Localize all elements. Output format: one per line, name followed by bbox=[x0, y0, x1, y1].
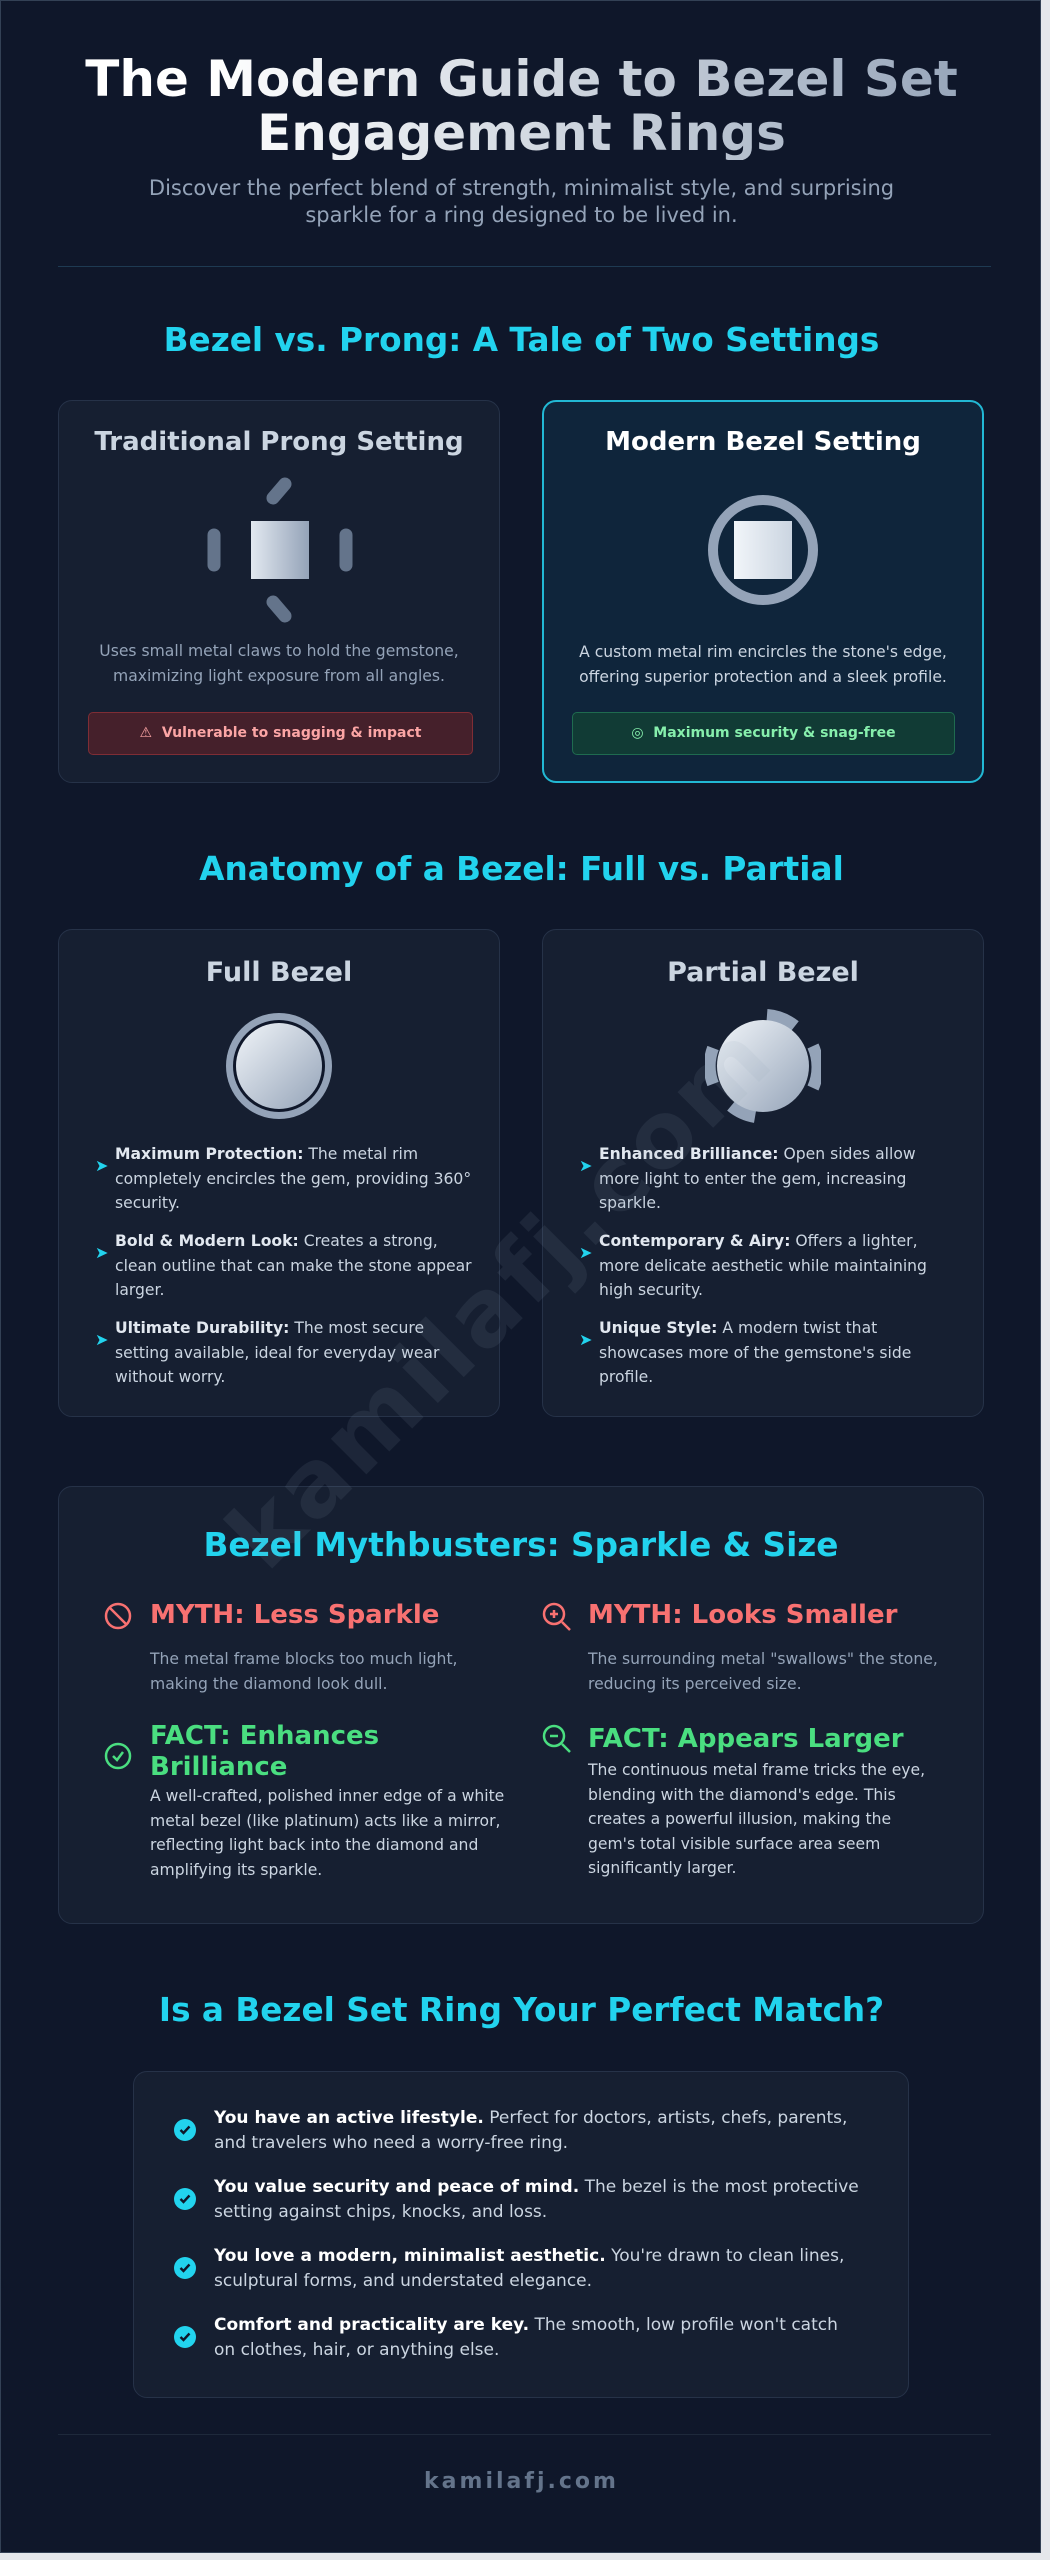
bullet list: full bezel bbox=[95, 1145, 472, 1386]
subtitle: Discover the perfect blend of strength, minimalist style, and surprising bbox=[149, 176, 894, 200]
panel: partial bezel bbox=[542, 929, 984, 1417]
bullet list: partial bezel: ➤ bbox=[579, 1243, 592, 1262]
icon: check circle bbox=[104, 1742, 132, 1770]
bullet list: partial bezel: Contemporary & Airy: Offers a lighter, more delicate aesthetic while maintaining high security. bbox=[599, 1232, 927, 1299]
card title: prong: Traditional Prong Setting bbox=[94, 427, 464, 457]
icon: zoom in bbox=[542, 1602, 571, 1631]
icon: full bezel bbox=[226, 1013, 332, 1119]
item 3: You love a modern, minimalist aesthetic. You're drawn to clean lines, sculptural forms, and understated elegance. bbox=[214, 2246, 844, 2291]
panel: prong setting bbox=[58, 400, 500, 783]
heading: mythbusters: Bezel Mythbusters: Sparkle & Size bbox=[204, 1526, 838, 1564]
title: Engagement Rings bbox=[257, 104, 786, 162]
item 4: Comfort and practicality are key. The smooth, low profile won't catch on clothes, hair, or anything else. bbox=[214, 2315, 838, 2360]
subtitle bbox=[149, 176, 894, 227]
heading: perfect match: Is a Bezel Set Ring Your Perfect Match? bbox=[159, 1991, 884, 2029]
watermark: kamilafj.com bbox=[207, 1002, 795, 1590]
item 2: You value security and peace of mind. The bezel is the most protective setting against chips, knocks, and loss. bbox=[214, 2177, 859, 2222]
myth: looks smaller: The surrounding metal "swallows" the stone, reducing its perceived size. bbox=[588, 1650, 938, 1692]
fact: appears larger bbox=[542, 1724, 925, 1877]
fact: enhances brilliance bbox=[104, 1721, 504, 1878]
fact: enhances brilliance: A well-crafted, polished inner edge of a white metal bezel (like platinum) acts like a mirror, reflecting light back into the diamond and amplifying its sparkle. bbox=[150, 1787, 504, 1878]
bullet list: partial bezel: Enhanced Brilliance: Open sides allow more light to enter the gem, increasing sparkle. bbox=[599, 1145, 916, 1212]
bullet list: full bezel: Bold & Modern Look: Creates a strong, clean outline that can make the stone appear larger. bbox=[115, 1232, 472, 1299]
bullet list: full bezel: Ultimate Durability: The most secure setting available, ideal for everyday wear without worry. bbox=[115, 1319, 439, 1386]
item 1: You have an active lifestyle. Perfect for doctors, artists, chefs, parents, and travelers who need a worry-free ring. bbox=[214, 2108, 847, 2153]
myth: less sparkle: MYTH: Less Sparkle bbox=[150, 1600, 439, 1630]
myth: looks smaller bbox=[542, 1600, 938, 1692]
bullet list: full bezel: ➤ bbox=[95, 1330, 108, 1349]
icon: prong setting bbox=[208, 478, 352, 622]
title bbox=[1, 52, 1042, 160]
card title: partial bezel: Partial Bezel bbox=[667, 957, 859, 988]
subtitle: sparkle for a ring designed to be lived in. bbox=[305, 203, 738, 227]
description: prong: Uses small metal claws to hold the gemstone, bbox=[99, 642, 459, 660]
fact: enhances brilliance: FACT: Enhances Brilliance bbox=[150, 1721, 379, 1782]
fact: appears larger: FACT: Appears Larger bbox=[588, 1724, 904, 1754]
fact: appears larger: The continuous metal frame tricks the eye, blending with the diamond's edge. This creates a powerful illusion, making the gem's total visible surface area seem significantly larger. bbox=[588, 1761, 925, 1877]
description: bezel bbox=[579, 643, 947, 686]
badge: secure: ◎ Maximum security & snag-free bbox=[631, 725, 896, 741]
panel: checklist bbox=[133, 2071, 909, 2398]
bullet list: partial bezel: Unique Style: A modern twist that showcases more of the gemstone's side profile. bbox=[599, 1319, 911, 1386]
icon: zoom out bbox=[542, 1724, 571, 1753]
card title: bezel: Modern Bezel Setting bbox=[605, 427, 921, 457]
description: bezel: offering superior protection and a sleek profile. bbox=[579, 668, 947, 686]
bullet list: partial bezel: ➤ bbox=[579, 1156, 592, 1175]
panel: mythbusters bbox=[58, 1486, 984, 1924]
myth: looks smaller: MYTH: Looks Smaller bbox=[588, 1600, 897, 1630]
icon: ban bbox=[104, 1602, 132, 1630]
description: prong bbox=[99, 642, 459, 685]
myth: less sparkle bbox=[104, 1600, 458, 1692]
myth: less sparkle: The metal frame blocks too much light, making the diamond look dull. bbox=[150, 1650, 458, 1692]
bullet list: full bezel: ➤ bbox=[95, 1243, 108, 1262]
panel: bezel setting bbox=[542, 400, 984, 783]
title: The Modern Guide to Bezel Set bbox=[85, 50, 958, 108]
bullet list: partial bezel: ➤ bbox=[579, 1330, 592, 1349]
badge: vulnerable bbox=[88, 712, 473, 755]
card title: full bezel: Full Bezel bbox=[206, 957, 352, 988]
icon: partial bezel bbox=[705, 1009, 821, 1123]
bullet list: full bezel: ➤ bbox=[95, 1156, 108, 1175]
icon: bezel setting bbox=[708, 495, 818, 605]
heading: bezel vs prong: Bezel vs. Prong: A Tale of Two Settings bbox=[164, 321, 879, 359]
badge: secure bbox=[572, 712, 955, 755]
bullet list: partial bezel bbox=[579, 1145, 927, 1386]
description: bezel: A custom metal rim encircles the stone's edge, bbox=[579, 643, 947, 661]
panel: full bezel bbox=[58, 929, 500, 1417]
description: prong: maximizing light exposure from all angles. bbox=[113, 667, 445, 685]
heading: anatomy: Anatomy of a Bezel: Full vs. Partial bbox=[199, 850, 844, 888]
badge: vulnerable: ⚠ Vulnerable to snagging & impact bbox=[140, 725, 421, 741]
bullet list: full bezel: Maximum Protection: The metal rim completely encircles the gem, providing 360° security. bbox=[115, 1145, 471, 1212]
footer: kamilafj.com bbox=[424, 2469, 619, 2494]
